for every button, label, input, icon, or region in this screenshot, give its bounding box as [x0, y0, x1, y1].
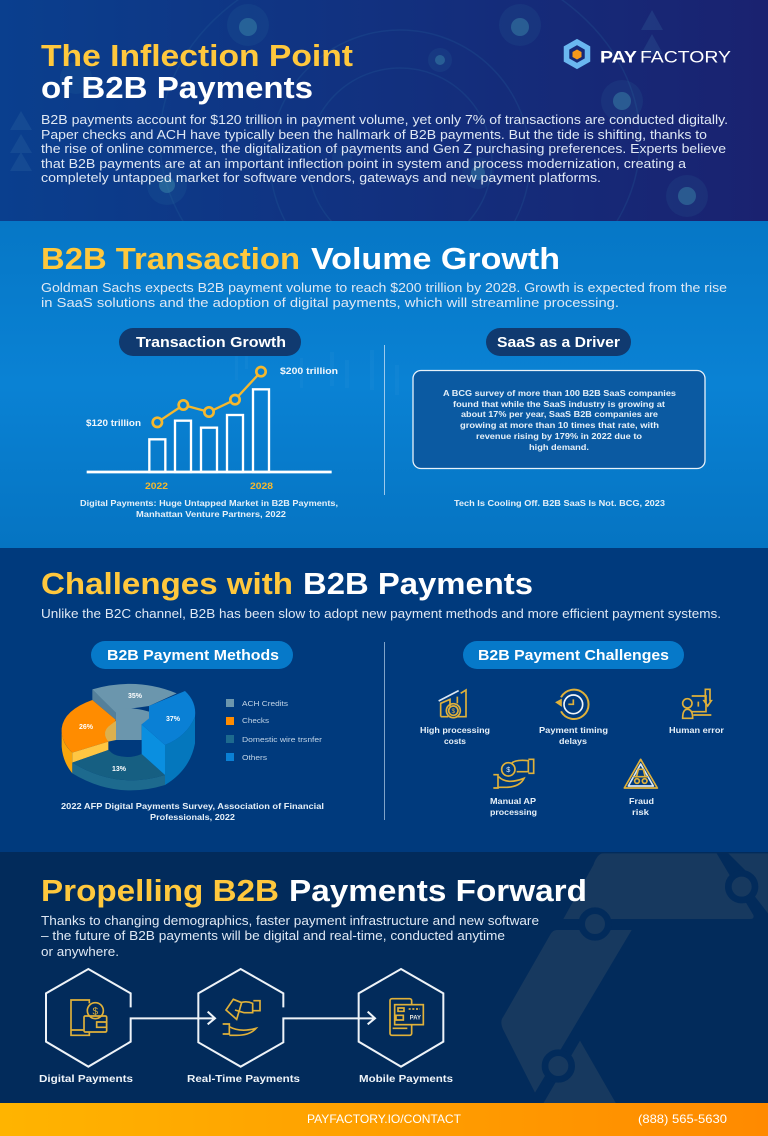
heading: volume growth [41, 241, 560, 276]
pill: B2B Payment Challenges: B2B Payment Challenges [478, 647, 669, 664]
labels: payment challenges: risk [632, 807, 649, 817]
text block: propelling forward: – the future of B2B payments will be digital and real-time, conducted anytime [41, 928, 505, 943]
labels: payment challenges: High processing [420, 725, 490, 735]
labels: payment challenges: Human error [669, 725, 725, 735]
chart: 3D donut of payment methods: 35% [128, 693, 143, 700]
icon: mobile pay: PAY [410, 1015, 421, 1021]
labels: payment challenges: delays [559, 736, 587, 746]
text block: intro: completely untapped market for software vendors, gateways and new payment platforms. [41, 170, 601, 185]
icon: wallet and phone [71, 1000, 107, 1035]
bar chart: transaction growth: 2022 [145, 481, 168, 492]
pill: B2B Payment Methods [91, 641, 293, 669]
labels: payment challenges: costs [444, 736, 466, 746]
pill: SaaS as a Driver: SaaS as a Driver [497, 334, 620, 351]
panel: propelling forward [0, 852, 768, 1103]
hexagon: mobile payments [359, 969, 443, 1067]
text block: volume growth: Goldman Sachs expects B2B payment volume to reach $200 trillion by 2028. Growth is expected from the rise [41, 280, 727, 295]
text block: intro [41, 112, 728, 185]
caption: AFP source: 2022 AFP Digital Payments Survey, Association of Financial [61, 801, 324, 811]
chart: 3D donut of payment methods: 13% [112, 766, 127, 773]
pill: B2B Payment Challenges [463, 641, 684, 669]
heading: challenges: Challenges with [41, 566, 293, 601]
labels: payment challenges: Manual AP [490, 796, 536, 806]
text block: intro: Paper checks and ACH have typically been the hallmark of B2B payments. But the tide is shifting, thanks to [41, 127, 707, 142]
labels: payment types: Digital Payments [39, 1074, 133, 1085]
text block: intro: the rise of online commerce, the digitalization of payments and Gen Z purchasing preferences. Experts believe [41, 141, 726, 156]
bar chart: transaction growth: $200 trillion [280, 366, 338, 376]
footer: (888) 565-5630 [638, 1112, 727, 1126]
heading: propelling forward [41, 873, 587, 908]
callout: BCG survey: high demand. [529, 442, 589, 452]
icon group: payment challenges [439, 689, 711, 788]
labels: payment challenges [420, 725, 725, 817]
icon: wallet and phone: $ [93, 1006, 99, 1017]
heading: propelling forward: Payments Forward [289, 873, 587, 908]
heading: challenges: B2B Payments [303, 566, 533, 601]
chart: 3D donut of payment methods [62, 684, 195, 790]
caption: AFP source [61, 801, 324, 822]
icon: manual AP processing [493, 759, 534, 788]
labels: payment types: Mobile Payments [359, 1074, 453, 1085]
segment: domestic wire [72, 750, 165, 790]
callout: BCG survey: about 17% per year, SaaS B2B companies are [461, 409, 658, 419]
icon: high processing costs: $ [451, 708, 455, 715]
icon: fraud risk [624, 759, 657, 788]
heading: challenges [41, 566, 533, 601]
labels: payment challenges: processing [490, 807, 537, 817]
footer: PAYFACTORY.IO/CONTACT [307, 1112, 462, 1126]
logo: PayFactory [566, 42, 731, 66]
icon: mobile pay [390, 999, 423, 1035]
legend: payment methods [226, 699, 323, 762]
text block: propelling forward: or anywhere. [41, 944, 119, 959]
title [41, 38, 353, 105]
caption: BCG source: Tech Is Cooling Off. B2B SaaS Is Not. BCG, 2023 [454, 498, 665, 508]
legend: payment methods: ACH Credits [242, 699, 288, 708]
pill: B2B Payment Methods: B2B Payment Methods [107, 647, 279, 664]
segment: others [142, 691, 195, 785]
caption: transaction growth source: Manhattan Venture Partners, 2022 [136, 509, 286, 519]
segment: ACH credits [92, 684, 177, 740]
legend: payment methods: Domestic wire trsnfer [242, 735, 323, 744]
title: The Inflection Point [41, 38, 353, 73]
heading: volume growth: Volume Growth [311, 241, 560, 276]
hexagon: real-time payments [198, 969, 375, 1067]
logo: PayFactory: PAY [600, 48, 638, 66]
icon: payment timing delays [557, 690, 589, 719]
bar chart: transaction growth: 2028 [250, 481, 273, 492]
logo: PayFactory: FACTORY [640, 48, 731, 66]
panel: challenges [0, 548, 768, 852]
callout: BCG survey: growing at more than 10 times that rate, with [460, 420, 659, 430]
text block: volume growth [41, 280, 727, 310]
pill: Transaction Growth [119, 328, 301, 356]
callout: BCG survey: A BCG survey of more than 100 B2B SaaS companies [443, 388, 676, 398]
callout: BCG survey [413, 370, 705, 468]
labels: payment types: Real-Time Payments [187, 1074, 301, 1085]
pill: SaaS as a Driver [486, 328, 631, 356]
text block: propelling forward [41, 913, 539, 959]
hexagon: digital payments [46, 969, 215, 1067]
text block: intro: B2B payments account for $120 trillion in payment volume, yet only 7% of transactions are conducted digitally. [41, 112, 728, 127]
labels: payment types [39, 1074, 453, 1085]
icon: exchanging hands [223, 999, 260, 1035]
callout: BCG survey: revenue rising by 179% in 2022 due to [476, 431, 642, 441]
footer [0, 1103, 768, 1136]
title: of B2B Payments [41, 70, 313, 105]
chart: 3D donut of payment methods: 37% [166, 716, 181, 723]
panel: transaction volume growth [0, 221, 768, 548]
caption: AFP source: Professionals, 2022 [150, 812, 235, 822]
bar chart: transaction growth: $120 trillion [86, 418, 141, 428]
diagram: payment types flow [46, 969, 443, 1067]
heading: propelling forward: Propelling B2B [41, 873, 279, 908]
text block: challenges: Unlike the B2C channel, B2B has been slow to adopt new payment methods and more efficient payment systems. [41, 606, 721, 621]
labels: payment challenges: Fraud [629, 796, 654, 806]
heading: volume growth: B2B Transaction [41, 241, 300, 276]
legend: payment methods: Checks [242, 716, 269, 725]
segment: checks [62, 700, 116, 773]
icon: manual AP processing: $ [506, 765, 510, 774]
text block: intro: that B2B payments are at an important inflection point in system and process modernization, creating a [41, 156, 687, 171]
icon: high processing costs [439, 690, 466, 718]
text block: volume growth: in SaaS solutions and the adoption of digital payments, which will streamline processing. [41, 295, 619, 310]
icon: human error [683, 689, 711, 718]
legend: payment methods: Others [242, 753, 267, 762]
chart: 3D donut of payment methods: 26% [79, 724, 94, 731]
pill: Transaction Growth: Transaction Growth [136, 334, 286, 351]
panel: header [0, 0, 768, 330]
text block: propelling forward: Thanks to changing demographics, faster payment infrastructure and new software [41, 913, 539, 928]
caption: transaction growth source [80, 498, 338, 519]
labels: payment challenges: Payment timing [539, 725, 608, 735]
callout: BCG survey: found that while the SaaS industry is growing at [453, 399, 665, 409]
caption: transaction growth source: Digital Payments: Huge Untapped Market in B2B Payments, [80, 498, 338, 508]
bar chart: transaction growth [86, 366, 338, 492]
